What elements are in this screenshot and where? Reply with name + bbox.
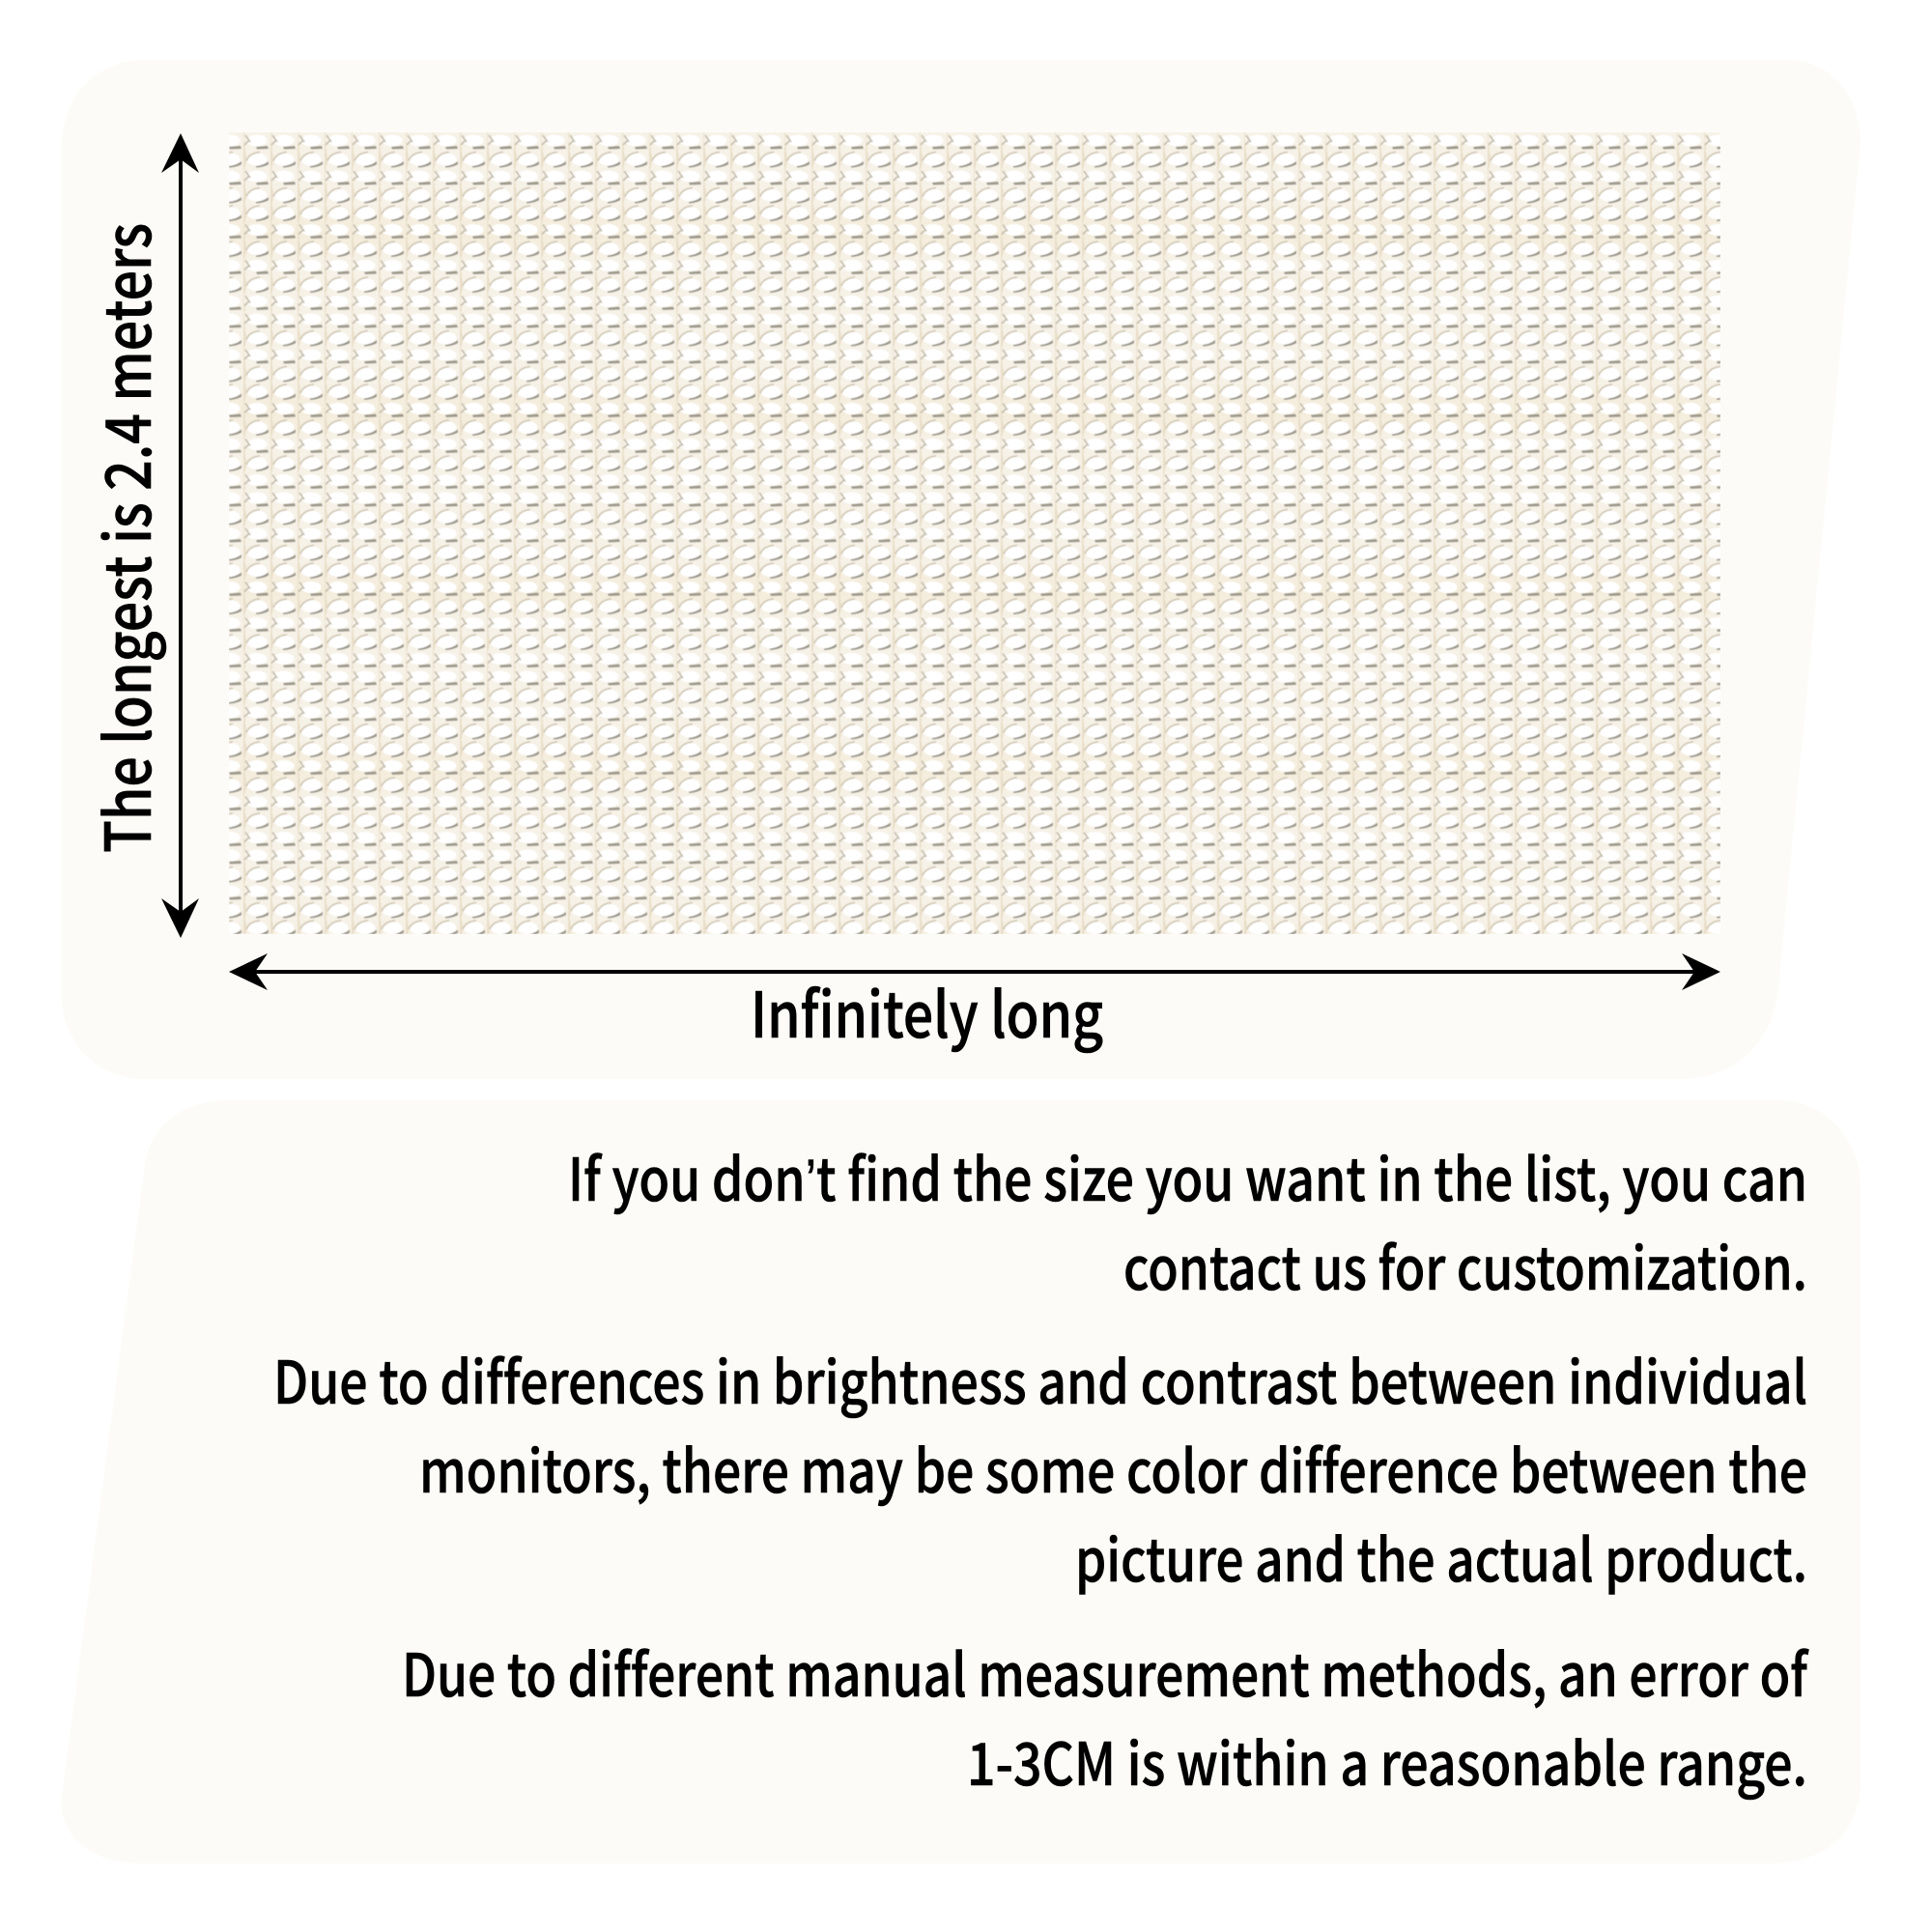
note: color difference: picture and the actual product. [1075,1513,1807,1599]
fabric swatch [229,132,1720,934]
note: customization [568,1132,1807,1307]
note: color difference [273,1335,1807,1599]
note: measurement error [402,1628,1809,1803]
arrow: vertical height [161,133,199,938]
note: measurement error: 1-3CM is within a reasonable range. [967,1717,1807,1803]
note: customization: contact us for customization. [1123,1221,1807,1307]
panel: notes [62,1100,1861,1863]
vertical label: height limit: The longest is 2.4 meters [78,223,169,853]
panel: fabric size diagram [62,60,1861,1079]
horizontal label: length: Infinitely long [751,965,1103,1056]
arrow: horizontal length [229,953,1720,990]
